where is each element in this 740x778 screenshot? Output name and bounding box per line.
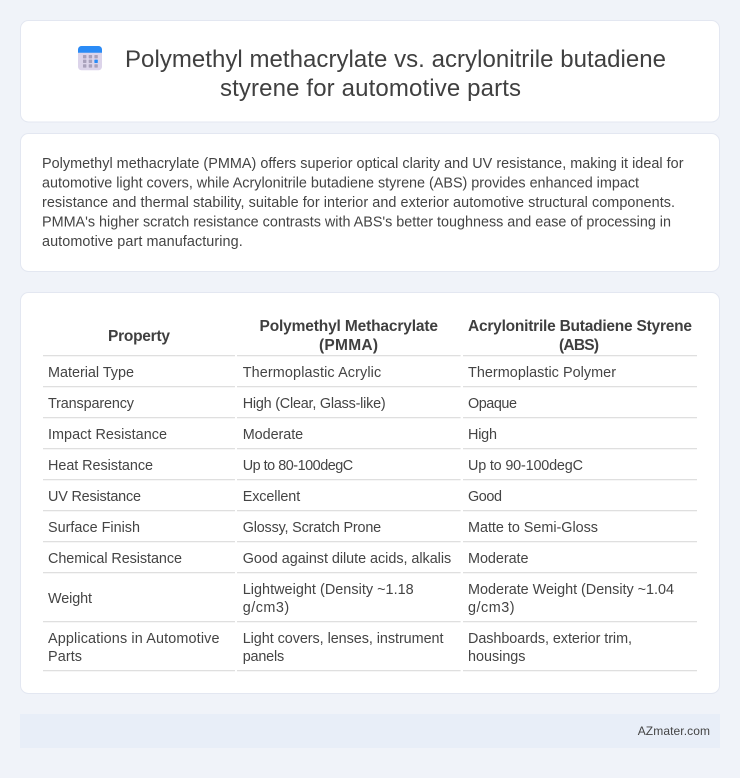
row: uv resistance: UV Resistance: [48, 489, 141, 505]
panel: comparison table: [20, 292, 720, 694]
row: impact resistance: Moderate: [243, 427, 303, 443]
row: material type: Material Type: [48, 365, 134, 381]
row: material type: Thermoplastic Polymer: [468, 365, 616, 381]
row: impact resistance: High: [468, 427, 497, 443]
row: uv resistance: [48, 489, 502, 505]
footer bar: [20, 714, 720, 748]
row: weight: g/cm3): [243, 600, 289, 616]
table header row: Polymethyl Methacrylate: [260, 318, 438, 335]
row: impact resistance: Impact Resistance: [48, 427, 167, 443]
row: surface finish: Surface Finish: [48, 520, 140, 536]
row: applications in automotive parts: Applications in Automotive: [48, 631, 220, 647]
row: material type: Thermoplastic Acrylic: [243, 365, 381, 381]
row: weight: Lightweight (Density ~1.18: [243, 582, 414, 598]
row: applications in automotive parts: housings: [468, 649, 526, 665]
title: styrene for automotive parts: [220, 75, 521, 102]
row: applications in automotive parts: Light covers, lenses, instrument: [243, 631, 444, 647]
row: heat resistance: [48, 458, 583, 474]
row: uv resistance: Good: [468, 489, 502, 505]
panel: title card: [20, 20, 720, 122]
summary text block: [42, 156, 684, 250]
summary text block: automotive light covers, while Acrylonitrile butadiene styrene (ABS) provides enhanced impact: [42, 175, 639, 191]
row: transparency: High (Clear, Glass-like): [243, 396, 386, 412]
row: chemical resistance: [48, 551, 528, 567]
summary text block: automotive part manufacturing.: [42, 234, 243, 250]
row: weight: [48, 582, 674, 616]
row: surface finish: Matte to Semi-Gloss: [468, 520, 598, 536]
row: uv resistance: Excellent: [243, 489, 300, 505]
row: heat resistance: Heat Resistance: [48, 458, 153, 474]
row: heat resistance: Up to 90-100degC: [468, 458, 583, 474]
row: applications in automotive parts: panels: [243, 649, 284, 665]
row: applications in automotive parts: [48, 631, 632, 665]
summary text block: Polymethyl methacrylate (PMMA) offers superior optical clarity and UV resistance, making it ideal for: [42, 156, 684, 172]
icon: calendar: [78, 46, 102, 70]
row: surface finish: [48, 520, 598, 536]
table header row: (PMMA): [319, 337, 378, 354]
footer source text: AZmater.com: [638, 724, 710, 738]
row: weight: Weight: [48, 591, 92, 607]
summary text block: PMMA's higher scratch resistance contrasts with ABS's better toughness and ease of processing in: [42, 214, 671, 230]
row: applications in automotive parts: Dashboards, exterior trim,: [468, 631, 632, 647]
row: applications in automotive parts: Parts: [48, 649, 82, 665]
table header row: (ABS): [559, 337, 599, 354]
row: transparency: [48, 396, 517, 412]
row: weight: Moderate Weight (Density ~1.04: [468, 582, 674, 598]
row: chemical resistance: Moderate: [468, 551, 528, 567]
title: Polymethyl methacrylate vs. acrylonitrile butadiene: [125, 46, 666, 73]
table header row: Property: [108, 328, 170, 345]
row: weight: g/cm3): [468, 600, 514, 616]
row: material type: [48, 365, 616, 381]
title: [125, 46, 666, 102]
summary text block: resistance and thermal stability, suitable for interior and exterior automotive structural components.: [42, 195, 675, 211]
table header row: Acrylonitrile Butadiene Styrene: [468, 318, 692, 335]
row: transparency: Opaque: [468, 396, 517, 412]
row: surface finish: Glossy, Scratch Prone: [243, 520, 381, 536]
row: chemical resistance: Good against dilute acids, alkalis: [243, 551, 451, 567]
row: chemical resistance: Chemical Resistance: [48, 551, 182, 567]
panel: summary: [20, 134, 720, 272]
table header row: [108, 318, 692, 354]
row: transparency: Transparency: [48, 396, 135, 412]
row: heat resistance: Up to 80-100degC: [243, 458, 353, 474]
row: impact resistance: [48, 427, 497, 443]
